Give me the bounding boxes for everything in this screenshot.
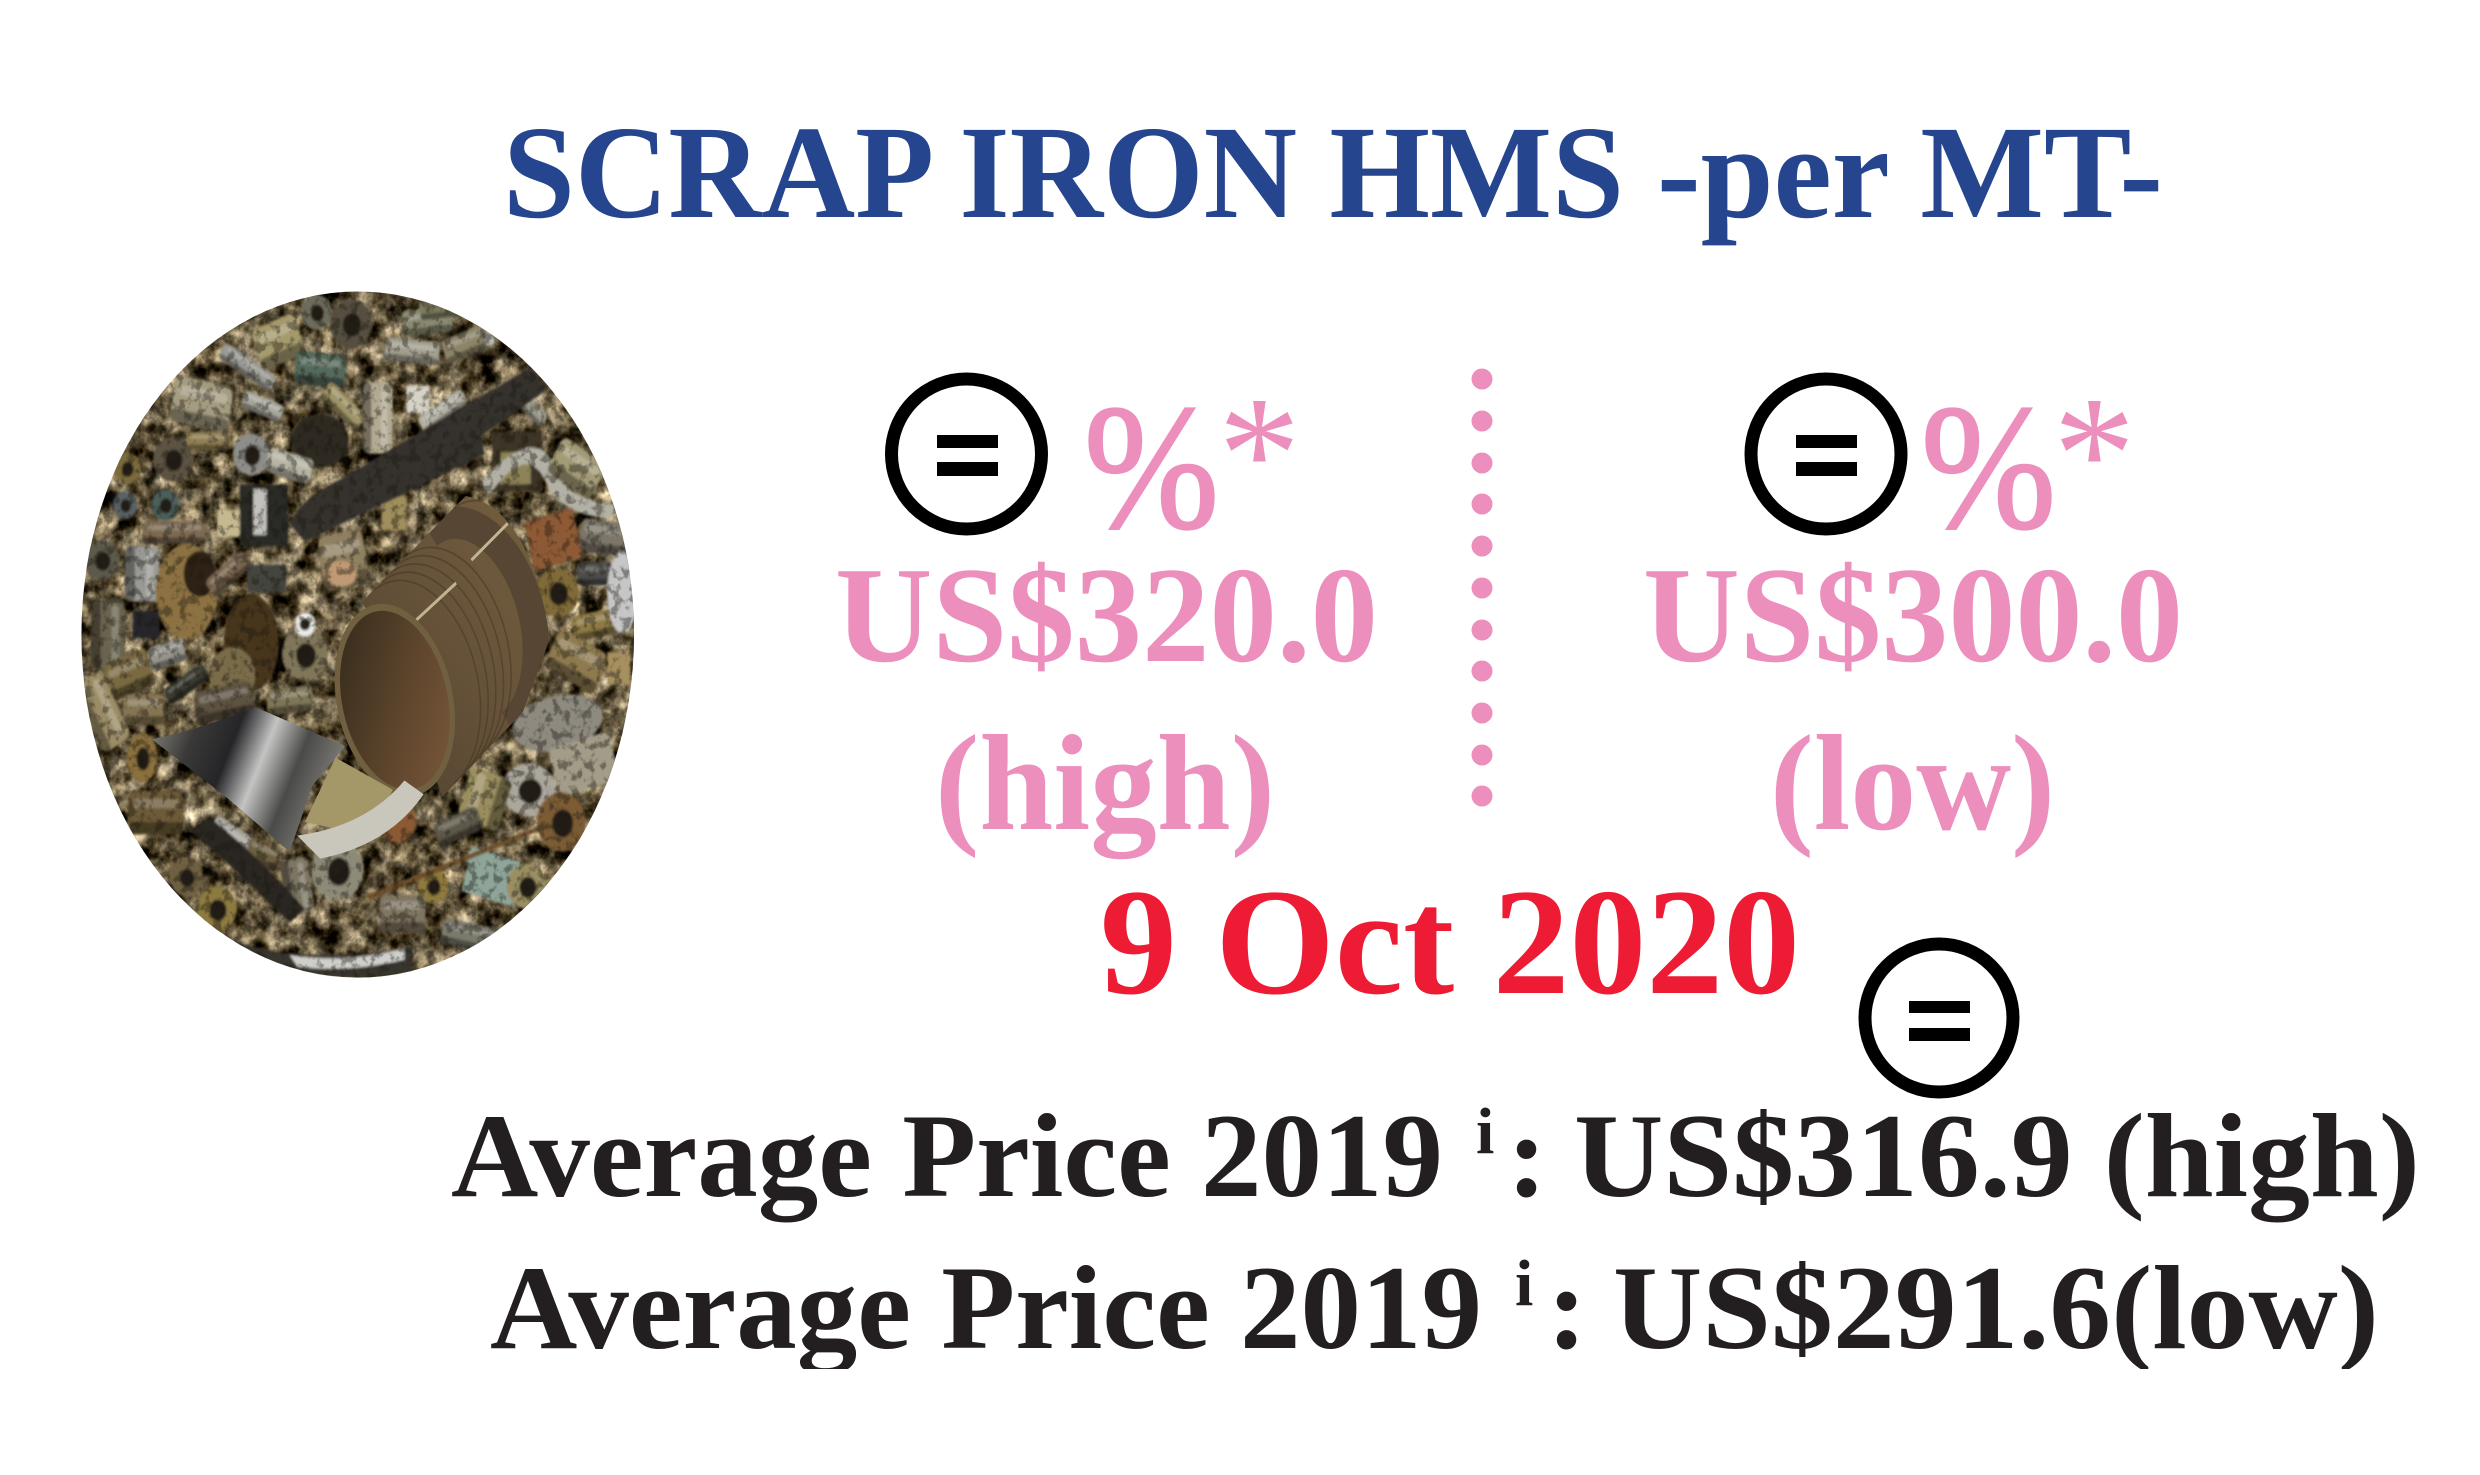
average price low: : (1547, 1241, 1587, 1374)
dotted divider (1472, 368, 1492, 806)
infographic: scrap iron price (81, 129, 2415, 1369)
average price low (490, 1241, 2379, 1375)
shading (81, 292, 634, 978)
title (503, 98, 2163, 246)
low price column (1643, 362, 2183, 859)
brass elbow (297, 758, 424, 859)
average price low: i (1515, 1247, 1533, 1320)
percent change high: * (1218, 362, 1300, 545)
percent change low (1921, 362, 2136, 566)
average price high (451, 1089, 2420, 1223)
price high: US$320.0 (835, 539, 1378, 691)
average price low: US$291.6(low) (1613, 1241, 2379, 1374)
percent change low: * (2053, 362, 2136, 545)
label high: (high) (935, 707, 1275, 859)
photo: pile of scrap metal (60, 280, 660, 1000)
average price high: : (1507, 1089, 1547, 1222)
dark scrap bar (290, 367, 546, 542)
average price high: US$316.9 (high) (1574, 1089, 2420, 1223)
price low: US$300.0 (1643, 539, 2183, 691)
average price high: i (1476, 1095, 1494, 1168)
title: SCRAP IRON HMS (503, 98, 1624, 246)
label low: (low) (1770, 707, 2055, 859)
average price low: Average Price 2019 (490, 1241, 1482, 1375)
percent change high: % (1084, 368, 1219, 566)
high price column (835, 362, 1378, 859)
title: -per MT- (1657, 98, 2163, 246)
icon: unchanged average (1865, 944, 2013, 1092)
average price high: Average Price 2019 (451, 1089, 1443, 1223)
date: 9 Oct 2020 (1100, 858, 1800, 1026)
icon: unchanged high (892, 379, 1042, 529)
percent change high (1084, 362, 1300, 566)
silver fragment (152, 707, 345, 852)
threaded pipe (334, 496, 550, 796)
icon: unchanged low (1751, 379, 1901, 529)
percent change low: % (1921, 368, 2056, 566)
